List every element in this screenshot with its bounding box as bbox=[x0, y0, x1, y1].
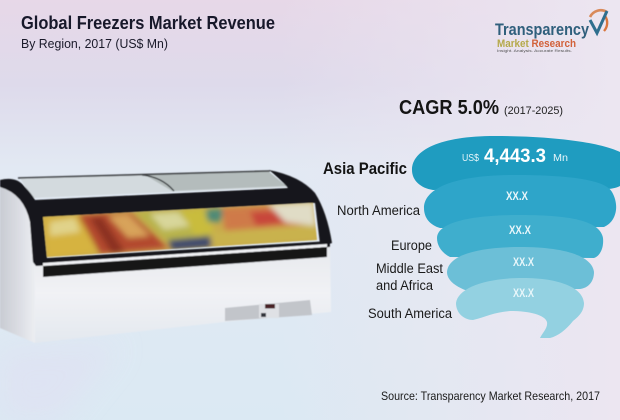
cream far end bbox=[268, 202, 316, 226]
red packages bbox=[78, 212, 168, 254]
funnel layer: Europe bbox=[437, 215, 603, 258]
funnel layer: South America bbox=[456, 278, 584, 338]
funnel layer: Asia Pacific bbox=[412, 136, 620, 190]
value: South America: XX.X bbox=[513, 288, 534, 300]
value: Europe: XX.X bbox=[509, 225, 531, 237]
logo: Transparency Market Research bbox=[495, 10, 607, 53]
value: North America: XX.X bbox=[506, 191, 528, 203]
label: Asia Pacific: Asia Pacific bbox=[323, 159, 407, 178]
dark blue packs bbox=[168, 236, 212, 250]
source note: Source: Transparency Market Research, 2017 bbox=[381, 389, 600, 403]
freezer glass lid bbox=[20, 171, 288, 198]
label: South America: South America bbox=[368, 306, 452, 321]
funnel layer: North America bbox=[424, 175, 616, 228]
orange items bbox=[222, 204, 306, 232]
value: Asia Pacific: 4,443.3 bbox=[484, 146, 546, 167]
green yellow centre bbox=[140, 212, 206, 244]
funnel layer: Middle East and Africa bbox=[447, 247, 594, 290]
label: Europe: Europe bbox=[391, 238, 432, 253]
value: Asia Pacific: Mn bbox=[553, 153, 568, 164]
subtitle: By Region, 2017 (US$ Mn) bbox=[21, 36, 168, 51]
freezer control panel bbox=[225, 300, 312, 321]
value: Asia Pacific: US$ bbox=[462, 152, 479, 164]
label: Middle East and Africa: Middle East bbox=[376, 261, 443, 276]
CAGR heading: (2017-2025) bbox=[504, 105, 563, 117]
freezer illustration bbox=[0, 170, 332, 343]
freezer handle bbox=[43, 247, 327, 277]
title: Global Freezers Market Revenue bbox=[21, 13, 275, 33]
freezer white strip bbox=[43, 244, 327, 266]
value: Middle East and Africa: XX.X bbox=[513, 257, 534, 269]
freezer front window with blurred food bbox=[40, 200, 320, 260]
logo second line: Market Research bbox=[497, 38, 576, 50]
CAGR heading: CAGR 5.0% bbox=[399, 96, 499, 119]
left produce bbox=[43, 215, 98, 258]
value: Asia Pacific bbox=[462, 146, 568, 167]
freezer black frame bbox=[0, 170, 332, 266]
label: North America: North America bbox=[337, 203, 420, 218]
logo wordmark: Transparency bbox=[495, 20, 589, 39]
icon: logo checkmark bbox=[590, 10, 607, 33]
funnel chart bbox=[412, 136, 620, 338]
freezer body bbox=[30, 243, 331, 343]
logo tagline: Insight. Analysis. Accurate Results. bbox=[497, 49, 572, 53]
freezer left end panel bbox=[0, 187, 35, 343]
label: Middle East and Africa: and Africa bbox=[376, 278, 433, 293]
CAGR heading bbox=[399, 96, 563, 119]
